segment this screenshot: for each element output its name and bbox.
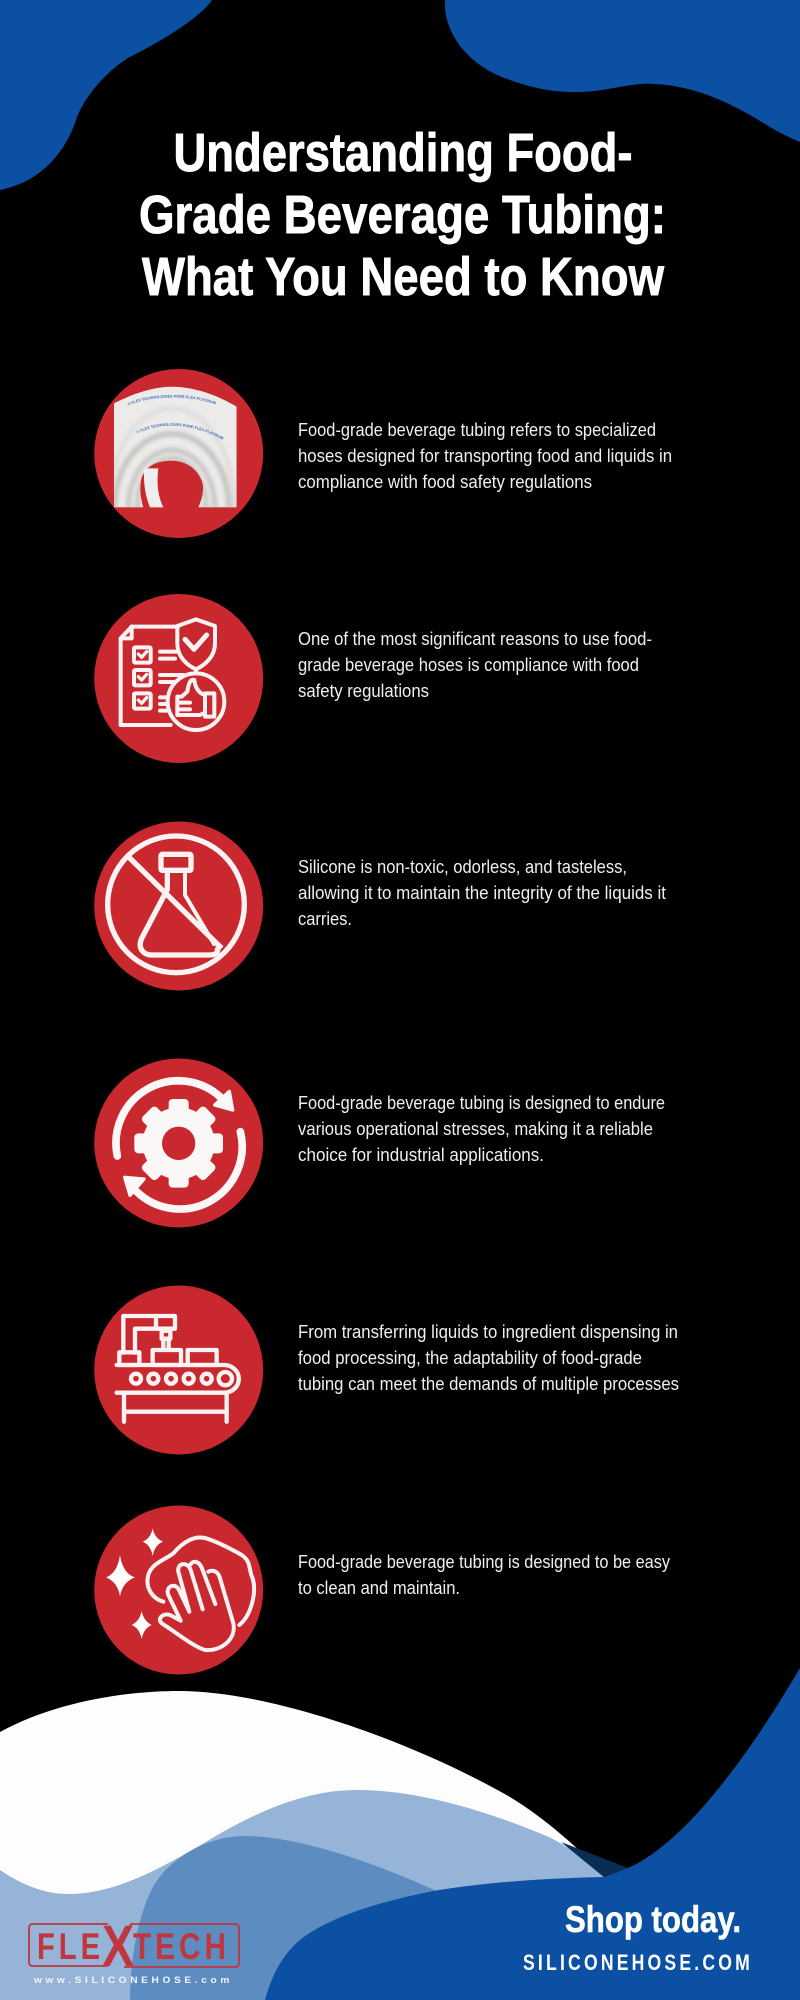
- title: Understanding Food-: [174, 123, 632, 183]
- item 6 text: to clean and maintain.: [298, 1577, 460, 1598]
- item 2 text: One of the most significant reasons to use food-: [298, 628, 652, 649]
- shield: [177, 619, 215, 673]
- logo frame: [29, 1924, 239, 1967]
- printed tube text: ® FLEX TECHNOLOGIES PURE-FLEX PLATINUM: [128, 394, 216, 406]
- item 6 text: Food-grade beverage tubing is designed to be easy: [298, 1551, 671, 1572]
- item 2 text: [298, 628, 652, 701]
- item 2 text: safety regulations: [298, 680, 429, 701]
- item 1 text: Food-grade beverage tubing refers to specialized: [298, 419, 656, 440]
- item 3 text: allowing it to maintain the integrity of the liquids it: [298, 882, 666, 903]
- item 5: conveyor icon circle: [94, 1286, 263, 1454]
- item 5 text: From transferring liquids to ingredient dispensing in: [298, 1321, 678, 1342]
- table legs: [124, 1393, 227, 1422]
- item 4 text: Food-grade beverage tubing is designed to endure: [298, 1092, 665, 1113]
- thumb circle: [168, 673, 224, 730]
- prohibition ring: [108, 836, 244, 973]
- item 1 text: compliance with food safety regulations: [298, 471, 592, 492]
- logo: Flextech: [29, 1914, 239, 1986]
- document: [121, 627, 178, 725]
- item 6: cleaning hand icon circle: [94, 1506, 263, 1674]
- blob: top left: [0, 0, 212, 190]
- item 5 text: food processing, the adaptability of food-grade: [298, 1347, 642, 1368]
- item 2: checklist icon circle: [94, 594, 263, 763]
- robot arm: [123, 1316, 175, 1353]
- conveyor belt: [117, 1365, 239, 1393]
- footer wave: dark blue: [265, 1668, 800, 2000]
- item 3: no-chemical flask icon circle: [94, 822, 263, 990]
- item 3 text: [298, 856, 666, 929]
- item 4 text: choice for industrial applications.: [298, 1144, 544, 1165]
- item 4 text: [298, 1092, 665, 1165]
- footer wave: white: [0, 1691, 607, 2000]
- item 4 text: various operational stresses, making it a reliable: [298, 1118, 653, 1139]
- sparkles: [106, 1528, 163, 1639]
- footer wave: light blue: [0, 1790, 620, 2000]
- item 5 text: [298, 1321, 679, 1394]
- item 2 text: grade beverage hoses is compliance with food: [298, 654, 639, 675]
- logo url: www.SILICONEHOSE.com: [33, 1975, 233, 1986]
- item 3 text: Silicone is non-toxic, odorless, and tasteless,: [298, 856, 627, 877]
- logo wordmark: X: [102, 1914, 134, 1979]
- cloth and hand: [147, 1537, 254, 1650]
- title: What You Need to Know: [142, 247, 665, 307]
- item 4: gear icon circle: [94, 1058, 263, 1228]
- boxes: [119, 1350, 217, 1365]
- footer wave: mid blue: [130, 1836, 500, 2000]
- list lines: [160, 652, 183, 711]
- logo wordmark: TECH: [133, 1926, 230, 1967]
- flask: [140, 854, 218, 955]
- title: Grade Beverage Tubing:: [139, 185, 666, 245]
- title: [139, 123, 666, 307]
- item 3 text: carries.: [298, 908, 352, 929]
- item 1 text: [298, 419, 672, 492]
- blob: top right: [445, 0, 800, 142]
- item 1: tubing photo circle: [94, 369, 264, 538]
- item 5 text: tubing can meet the demands of multiple processes: [298, 1373, 679, 1394]
- logo wordmark: FLE: [37, 1926, 104, 1967]
- item 1 text: hoses designed for transporting food and liquids in: [298, 445, 672, 466]
- checkboxes: [134, 647, 151, 709]
- inner tube end: [144, 468, 163, 507]
- footer wave: navy wedge: [561, 1842, 628, 1878]
- item 6 text: [298, 1551, 671, 1598]
- call to action: [523, 1899, 753, 1975]
- printed tube text: [128, 394, 224, 440]
- printed tube text: ® FLEX TECHNOLOGIES PURE-FLEX PLATINUM: [136, 423, 224, 440]
- rotation arrows: [116, 1081, 242, 1209]
- logo wordmark: [37, 1914, 230, 1979]
- call to action: Shop today.: [565, 1899, 741, 1940]
- gear: [134, 1099, 223, 1188]
